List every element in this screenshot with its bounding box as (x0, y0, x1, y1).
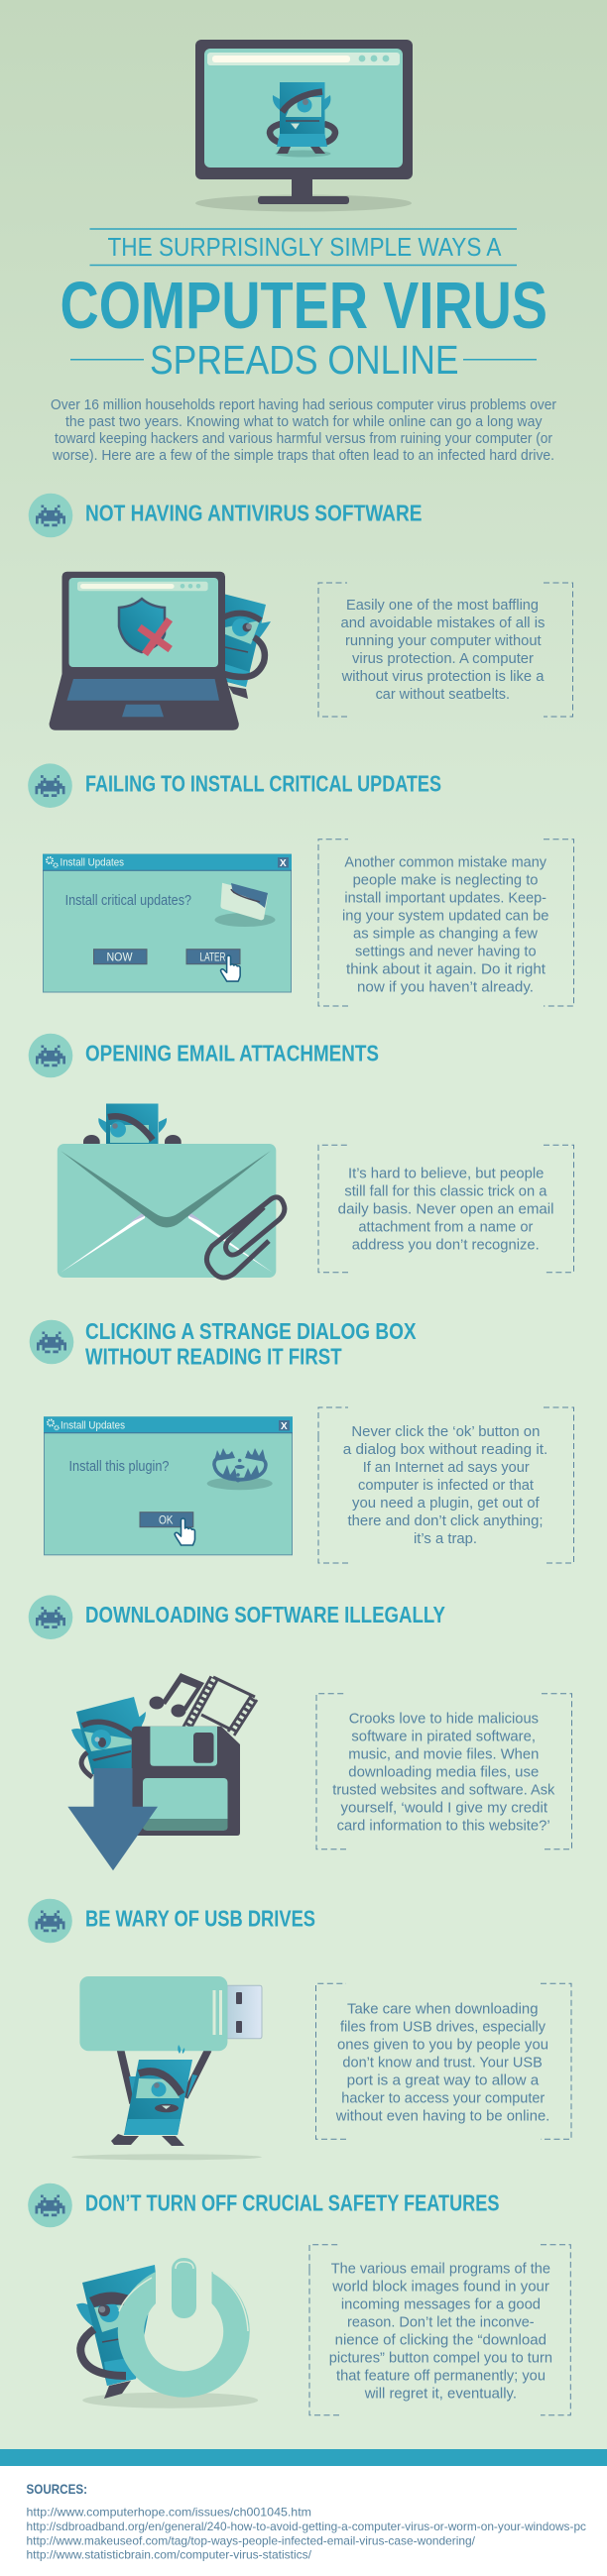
heading 2: FAILING TO INSTALL CRITICAL UPDATES (85, 770, 441, 796)
heading 4: WITHOUT READING IT FIRST (85, 1343, 342, 1369)
text box 6: Take care when downloading (347, 2000, 538, 2017)
sources list: http://sdbroadband.org/en/general/240-how-to-avoid-getting-a-computer-virus-or-worm-on-your-windows-pc (26, 2520, 586, 2533)
section 1: not having antivirus software (29, 494, 572, 730)
text box 4: computer is infected or that (358, 1477, 535, 1494)
dialog: install plugin: Install this plugin? (69, 1458, 169, 1475)
heading 7: DON’T TURN OFF CRUCIAL SAFETY FEATURES (85, 2190, 500, 2216)
dialog: install updates: LATER (200, 952, 226, 963)
section 5: downloading software illegally (29, 1595, 571, 1870)
illustration: floppy, music, film and monster (67, 1673, 255, 1870)
icon: computer monitor with virus monster (195, 40, 413, 212)
text box 1: without virus protection is like a (341, 668, 545, 685)
text box 4: you need a plugin, get out of (352, 1495, 541, 1512)
text box 4: If an Internet ad says your (363, 1459, 530, 1476)
text box 1: Easily one of the most baffling (346, 597, 539, 614)
title: SPREADS ONLINE (150, 337, 458, 383)
text box 6: ones given to you by people you (337, 2036, 548, 2053)
text box 1: car without seatbelts. (376, 686, 510, 703)
title: THE SURPRISINGLY SIMPLE WAYS A (107, 232, 502, 262)
text box 3: daily basis. Never open an email (338, 1201, 553, 1218)
text box 4: a dialog box without reading it. (343, 1441, 547, 1458)
sources panel (0, 2466, 607, 2576)
dialog: install plugin: X (281, 1421, 288, 1432)
dialog: install updates: X (280, 858, 287, 869)
intro text: toward keeping hackers and various harmful versus from ruining your computer (or (55, 430, 552, 447)
text box 1: running your computer without (345, 632, 542, 649)
intro text: Over 16 million households report having had serious computer virus problems over (51, 396, 556, 413)
dialog: install plugin: Install Updates (61, 1419, 125, 1431)
text box 2: ing your system updated can be (342, 908, 549, 925)
heading 6: BE WARY OF USB DRIVES (85, 1905, 315, 1931)
text box 3: still fall for this classic trick on a (344, 1183, 547, 1200)
icon: invader badge 5 (29, 1595, 72, 1639)
icon: invader badge 4 (30, 1320, 73, 1364)
text box 7: incoming messages for a good (341, 2296, 541, 2313)
heading 3: OPENING EMAIL ATTACHMENTS (85, 1040, 379, 1065)
heading 4: CLICKING A STRANGE DIALOG BOX (85, 1318, 417, 1344)
text box 7: that feature off permanently; you (336, 2368, 546, 2385)
text box 2 (318, 840, 573, 1006)
text box 5: music, and movie files. When (348, 1746, 539, 1763)
text box 7: pictures” button compel you to turn (329, 2350, 552, 2367)
text box 7 (309, 2245, 570, 2415)
section 4: clicking a strange dialog box (30, 1318, 573, 1563)
sources list: http://www.statisticbrain.com/computer-virus-statistics/ (26, 2548, 312, 2562)
text box 2: install important updates. Keep- (344, 890, 546, 907)
intro text: worse). Here are a few of the simple traps that often lead to an infected hard drive. (52, 447, 554, 464)
text box 1 (318, 583, 573, 717)
text box 5: Crooks love to hide malicious (349, 1711, 539, 1728)
illustration: laptop with monster (50, 572, 271, 730)
text box 2: think about it again. Do it right (346, 961, 546, 978)
text box 6: hacker to access your computer (341, 2089, 545, 2106)
section 6: be wary of usb drives (28, 1899, 571, 2160)
text box 6: don’t know and trust. Your USB (342, 2054, 543, 2071)
text box 2: settings and never having to (355, 944, 537, 960)
text box 5: software in pirated software, (351, 1729, 536, 1745)
text box 7: nience of clicking the “download (335, 2332, 546, 2349)
text box 4: it’s a trap. (414, 1530, 477, 1547)
text box 2: people make is neglecting to (353, 872, 538, 889)
text box 7: world block images found in your (331, 2279, 549, 2296)
section 2: failing to install critical updates (28, 763, 573, 1006)
text box 7: The various email programs of the (331, 2261, 550, 2278)
sources list (26, 2506, 586, 2562)
text box 1: and avoidable mistakes of all is (341, 615, 546, 631)
footer divider bar (0, 2449, 607, 2466)
text box 6: files from USB drives, especially (340, 2018, 546, 2035)
text box 1: virus protection. A computer (352, 650, 534, 667)
dialog: install plugin: OK (159, 1514, 174, 1526)
text box 4: Never click the ‘ok’ button on (351, 1423, 540, 1440)
icon: invader badge 2 (28, 763, 72, 808)
sources list: http://www.makeuseof.com/tag/top-ways-people-infected-email-virus-case-wondering/ (26, 2533, 476, 2547)
text box 4: there and don’t click anything; (347, 1512, 544, 1529)
icon: invader badge 3 (29, 1034, 72, 1077)
heading 5: DOWNLOADING SOFTWARE ILLEGALLY (85, 1602, 445, 1627)
sources list: http://www.computerhope.com/issues/ch001045.htm (26, 2506, 311, 2520)
dialog: install updates: NOW (107, 952, 133, 963)
dialog: install updates: Install critical updates? (65, 892, 191, 909)
text box 6: without even having to be online. (335, 2107, 549, 2124)
text box 4 (318, 1407, 573, 1563)
section 7: don't turn off crucial safety features (28, 2184, 570, 2415)
illustration: envelope with monster and paperclip (58, 1104, 285, 1278)
icon: invader badge 7 (28, 2184, 72, 2227)
heading 4 (85, 1318, 417, 1369)
text box 7: will regret it, eventually. (364, 2386, 517, 2403)
text box 7: reason. Don’t let the inconve- (347, 2314, 535, 2331)
dialog: install updates: Install Updates (60, 856, 124, 868)
icon: invader badge 1 (29, 494, 72, 537)
section 3: opening email attachments (29, 1034, 573, 1278)
sources heading: SOURCES: (26, 2481, 87, 2497)
text box 2: now if you haven’t already. (357, 979, 534, 996)
text box 6: port is a great way to allow a (347, 2072, 540, 2088)
illustration: power button with monster (76, 2258, 258, 2408)
dialog: install updates (43, 854, 292, 992)
text box 5: card information to this website?’ (337, 1818, 550, 1835)
text box 3 (318, 1145, 573, 1273)
text box 3: It’s hard to believe, but people (348, 1166, 544, 1182)
text box 3: address you don’t recognize. (352, 1237, 540, 1254)
dialog: install plugin (44, 1416, 293, 1555)
text box 2: as simple as changing a few (353, 926, 538, 943)
text box 6 (315, 1983, 571, 2139)
icon: invader badge 6 (28, 1899, 72, 1943)
text box 2: Another common mistake many (344, 854, 546, 871)
title (60, 229, 547, 383)
text box 3: attachment from a name or (358, 1219, 533, 1236)
illustration: usb drive held by monster (71, 1976, 262, 2160)
intro text (51, 396, 556, 464)
text box 5 (316, 1694, 571, 1849)
intro text: the past two years. Knowing what to watch for while online can go a long way (65, 413, 543, 430)
text box 5: trusted websites and software. Ask (332, 1782, 555, 1799)
heading 1: NOT HAVING ANTIVIRUS SOFTWARE (85, 500, 423, 525)
text box 5: downloading media files, use (348, 1764, 539, 1781)
text box 5: yourself, ‘would I give my credit (341, 1800, 548, 1817)
